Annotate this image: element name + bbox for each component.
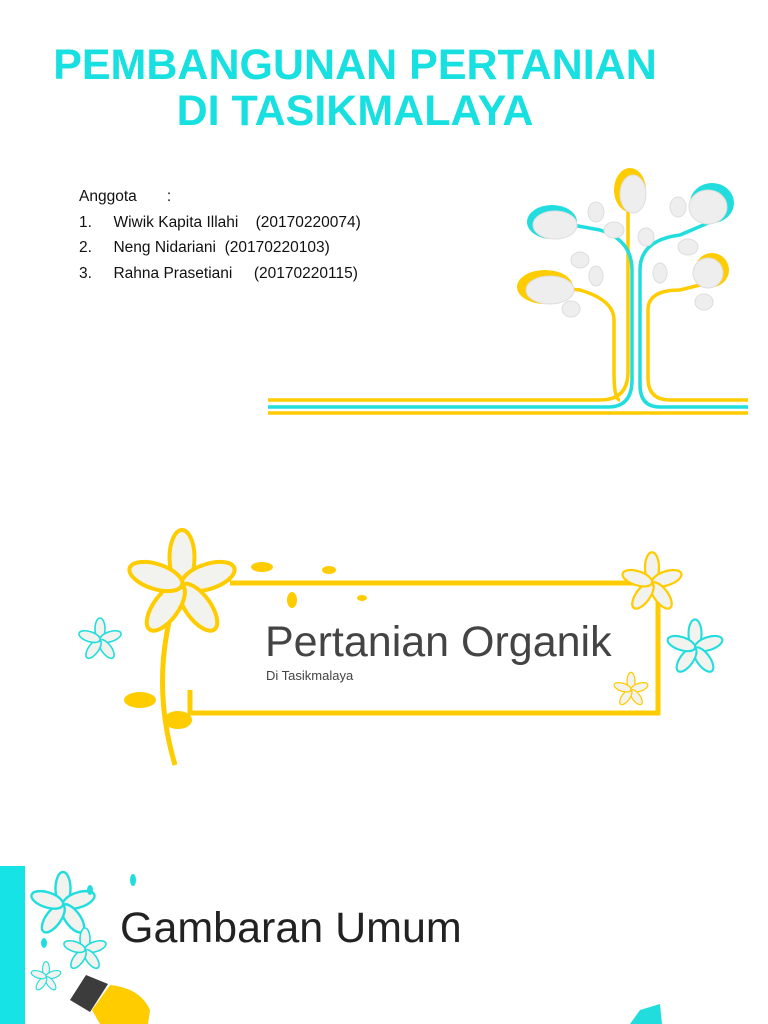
member list: Anggota : 1. Wiwik Kapita Illahi (20170220074) 2. Neng Nidariani (20170220103) 3. Rahna Prasetiani (20170220115) <box>79 188 361 282</box>
slide 3 heading: Gambaran Umum <box>120 904 462 952</box>
tree illustration <box>268 168 748 415</box>
title: PEMBANGUNAN PERTANIAN <box>53 41 657 89</box>
title: DI TASIKMALAYA <box>177 87 533 135</box>
slide 3 decorations <box>30 870 662 1024</box>
slide 2 heading: Pertanian Organik <box>265 618 612 666</box>
slide 2: frame with flowers <box>78 528 724 766</box>
slide 3 cyan bar <box>0 866 25 1024</box>
slide 2 subtitle: Di Tasikmalaya <box>266 668 353 683</box>
title <box>53 41 657 135</box>
